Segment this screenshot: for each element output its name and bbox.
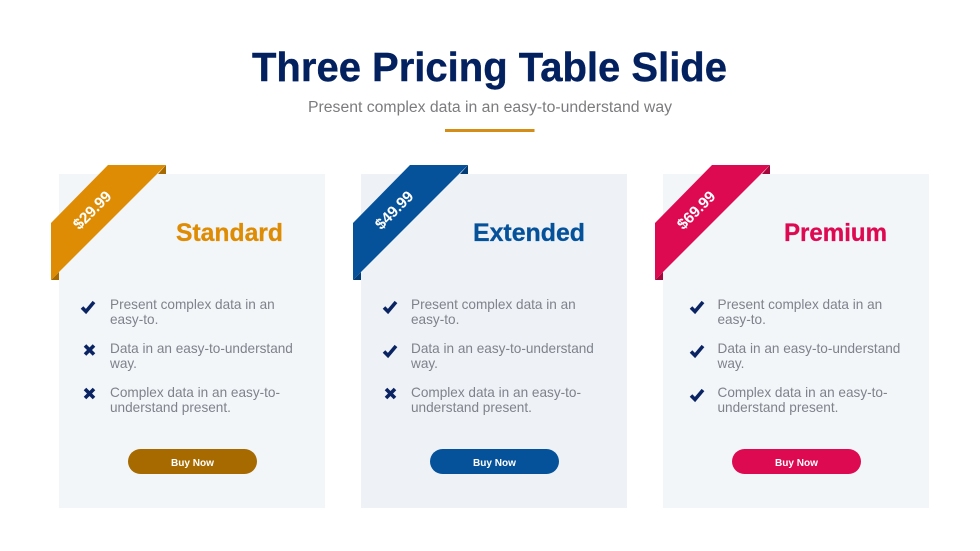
- buy button: Buy Now: [171, 457, 215, 469]
- feature text 2: Data in an easy-to-understand: [110, 341, 293, 356]
- feature text 2: way.: [716, 356, 744, 371]
- feature text 2: way.: [109, 356, 137, 371]
- plan name: Standard: [176, 219, 283, 247]
- feature text 3: understand present.: [110, 400, 231, 415]
- icon: check: [691, 390, 703, 400]
- icon: check: [384, 346, 396, 356]
- icon: cross: [85, 389, 94, 398]
- icon: cross: [386, 389, 395, 398]
- panel: Extended pricing card: [353, 165, 627, 508]
- icon: check: [691, 346, 703, 356]
- feature text 2: Data in an easy-to-understand: [718, 341, 900, 356]
- buy button: [732, 449, 861, 474]
- title: Three Pricing Table Slide: [252, 44, 727, 90]
- feature text 1: Present complex data in an: [718, 297, 882, 312]
- plan name: Premium: [784, 219, 887, 247]
- panel: Premium pricing card: [655, 165, 929, 508]
- buy button: Buy Now: [775, 457, 819, 469]
- feature text 2: Data in an easy-to-understand: [411, 341, 594, 356]
- feature text 1: easy-to.: [718, 312, 766, 327]
- icon: check: [691, 302, 703, 312]
- icon: check: [82, 302, 94, 312]
- price ribbon: [51, 165, 166, 280]
- price ribbon: [655, 165, 770, 280]
- plan name: Extended: [473, 219, 585, 247]
- icon: cross: [85, 346, 94, 354]
- icon: check: [384, 302, 396, 312]
- feature text 1: easy-to.: [110, 312, 158, 327]
- feature text 3: understand present.: [411, 400, 532, 415]
- price ribbon: [353, 165, 468, 280]
- buy button: [430, 449, 559, 474]
- feature text 3: Complex data in an easy-to-: [718, 385, 888, 400]
- feature text 3: Complex data in an easy-to-: [110, 385, 280, 400]
- price ribbon: $29.99: [70, 188, 116, 233]
- card background: [663, 174, 929, 508]
- feature text 2: way.: [410, 356, 438, 371]
- price ribbon: $49.99: [372, 188, 418, 233]
- subtitle: Present complex data in an easy-to-understand way: [308, 99, 672, 116]
- feature text 3: Complex data in an easy-to-: [411, 385, 581, 400]
- card background: [59, 174, 325, 508]
- price ribbon: $69.99: [674, 188, 720, 233]
- panel: Standard pricing card: [51, 165, 325, 508]
- feature text 3: understand present.: [718, 400, 838, 415]
- buy button: [128, 449, 257, 474]
- feature text 1: Present complex data in an: [411, 297, 576, 312]
- buy button: Buy Now: [473, 457, 517, 469]
- card background: [361, 174, 627, 508]
- feature text 1: easy-to.: [411, 312, 459, 327]
- accent underline: [445, 129, 534, 132]
- feature text 1: Present complex data in an: [110, 297, 275, 312]
